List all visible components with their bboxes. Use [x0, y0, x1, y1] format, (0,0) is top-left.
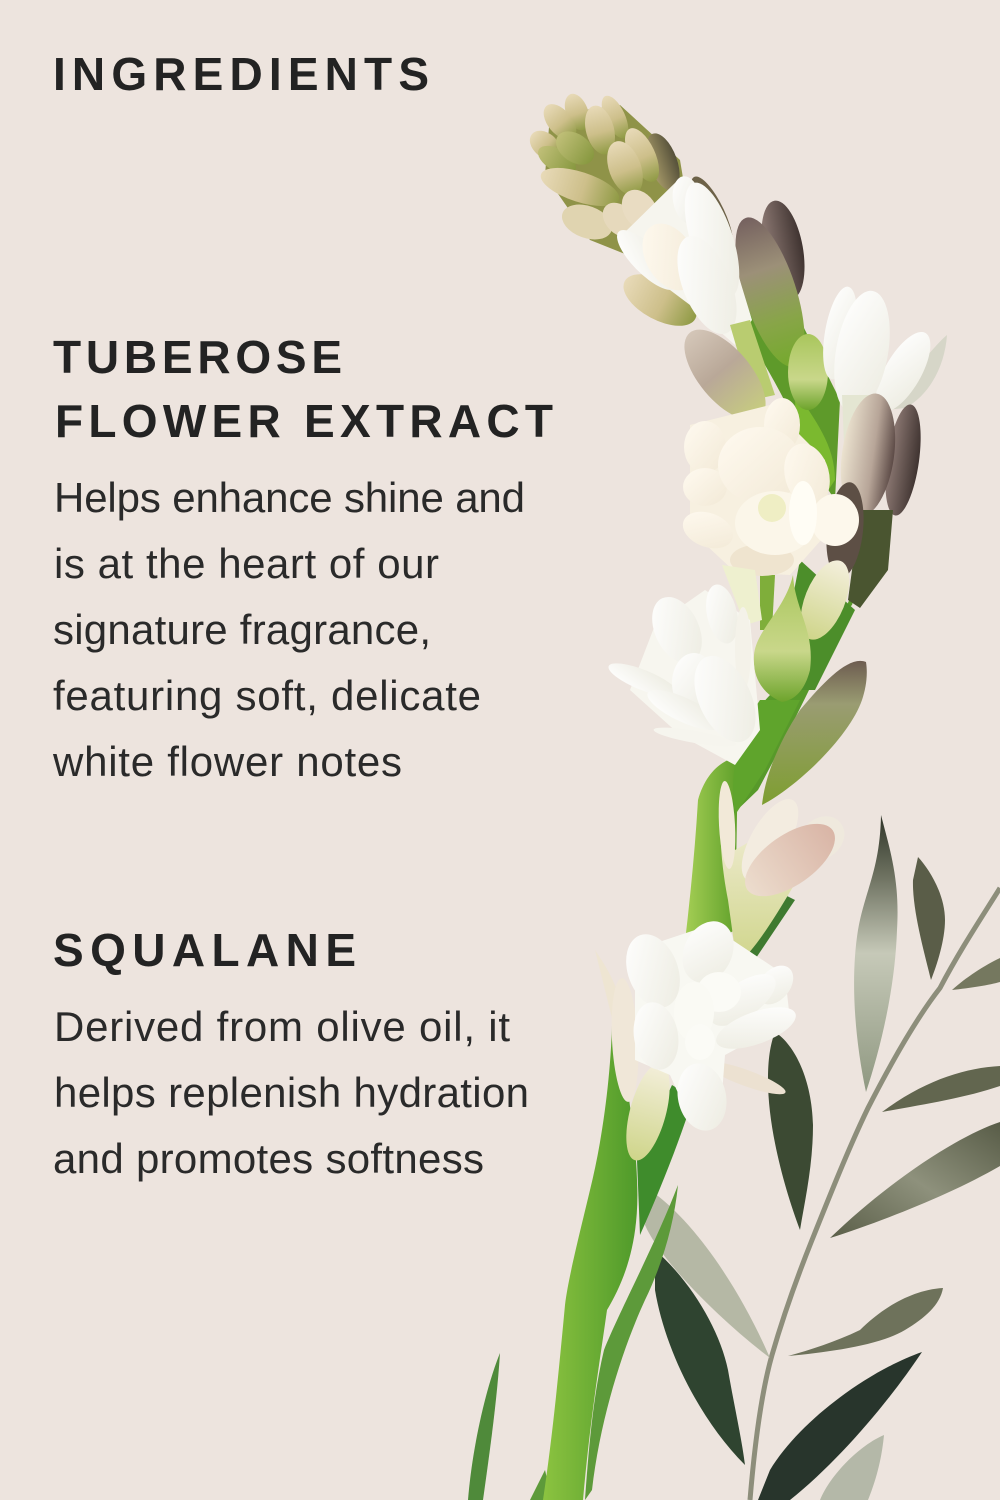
striped bud: right of stem — [791, 554, 859, 646]
middle stem — [637, 1085, 693, 1235]
white flower: top — [609, 174, 775, 400]
white flower: middle — [605, 582, 768, 765]
text block: squalane description: helps replenish hydration — [54, 1069, 529, 1116]
olive leaves — [645, 815, 1000, 1500]
purple buds: right — [822, 390, 927, 608]
top flower backing — [622, 178, 752, 345]
bloom backing — [690, 405, 830, 575]
purple-cream bud: centre — [670, 316, 780, 434]
heading: tuberose flower extract — [53, 331, 553, 447]
text block: tuberose description: Helps enhance shine and — [54, 474, 525, 521]
olive stem — [750, 888, 1000, 1500]
panel: tuberose flower extract — [52, 331, 553, 785]
green blades — [468, 1185, 678, 1500]
text block: squalane description — [53, 1003, 529, 1182]
illustration: olive branch — [645, 815, 1000, 1500]
middle flower backing — [630, 590, 760, 765]
cream flower: double bloom — [678, 398, 859, 576]
white flower: bottom — [595, 913, 801, 1165]
heading: tuberose flower extract: TUBEROSE — [53, 331, 342, 383]
text block: tuberose description: is at the heart of our — [54, 540, 439, 587]
text block: tuberose description: featuring soft, delicate — [53, 672, 481, 719]
upper stem — [684, 280, 866, 950]
bottom flower backing — [635, 925, 790, 1120]
white flower: right — [817, 284, 947, 470]
pink bud flower — [717, 781, 853, 965]
purple bud: top back — [755, 197, 811, 303]
dark bud behind flower — [682, 171, 742, 259]
green bud: teardrop — [754, 575, 811, 702]
text block: tuberose description: signature fragrance, — [53, 606, 431, 653]
panel: squalane — [53, 924, 529, 1182]
purple bud: top front — [721, 210, 819, 374]
heading: tuberose flower extract: FLOWER EXTRACT — [55, 395, 553, 447]
text block: squalane description: and promotes softness — [53, 1135, 484, 1182]
cream tube under bloom — [722, 565, 762, 625]
text block: tuberose description: white flower notes — [52, 738, 402, 785]
text block: squalane description: Derived from olive oil, it — [54, 1003, 510, 1050]
pale bud — [615, 264, 705, 336]
lower stem — [543, 990, 637, 1500]
bud cluster backing — [545, 105, 690, 260]
bract: large leaf bud — [762, 661, 867, 805]
heading: squalane: SQUALANE — [53, 924, 356, 976]
illustration: tuberose stalk — [468, 90, 947, 1500]
bud cluster — [524, 90, 690, 260]
text block: tuberose description — [52, 474, 525, 785]
green bud: centre — [788, 334, 828, 410]
title: INGREDIENTS — [53, 48, 429, 100]
